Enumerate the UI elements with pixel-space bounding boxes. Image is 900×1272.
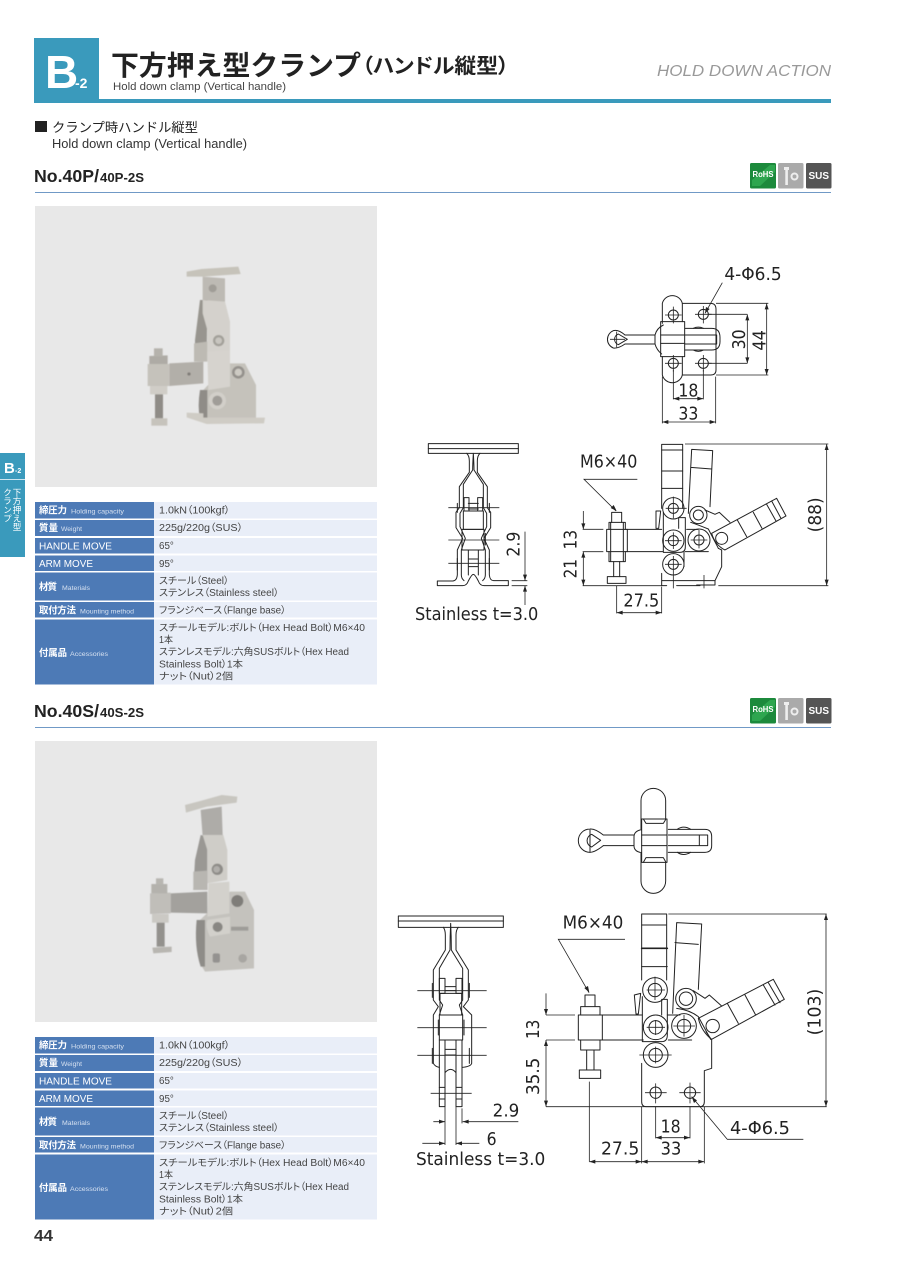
- row: weight: [35, 1055, 377, 1071]
- drawing: No.40P end view: [415, 444, 538, 625]
- row: weight: 225g/220g（SUS）: [159, 1057, 243, 1069]
- row: handle move: HANDLE MOVE: [39, 1076, 112, 1088]
- intro text: [35, 120, 247, 151]
- dimension labels: 21: [561, 559, 582, 578]
- row: accessories: 付属品: [39, 1182, 67, 1193]
- row: accessories: Stainless Bolt）1本: [159, 1192, 243, 1206]
- dimension labels: 18: [661, 1116, 681, 1137]
- product photo: No.40P: [35, 206, 377, 487]
- row: materials: ステンレス（Stainless steel）: [158, 1122, 279, 1134]
- row: mounting method: フランジベース（Flange base）: [159, 604, 286, 616]
- row: handle move: HANDLE MOVE: [39, 542, 112, 552]
- dimension labels: M6×40: [580, 451, 637, 472]
- row: handle move: 65°: [159, 541, 174, 552]
- row: accessories: ステンレスモデル:六角SUSボルト（Hex Head: [159, 1180, 349, 1193]
- side tab: -2: [15, 468, 21, 475]
- drawing: No.40S side view: [523, 912, 828, 1164]
- row: arm move: 95°: [159, 559, 174, 570]
- row: accessories: 付属品: [39, 647, 67, 658]
- intro text: クランプ時ハンドル縦型: [52, 120, 198, 135]
- row: holding capacity: [35, 1037, 377, 1054]
- dimension labels: 4-Φ6.5: [724, 264, 782, 285]
- row: arm move: 95°: [159, 1094, 174, 1105]
- row: mounting method: フランジベース（Flange base）: [159, 1140, 286, 1152]
- badges: No.40S: SUS: [808, 706, 829, 717]
- spec table: No.40P: [35, 502, 377, 684]
- section tab B-2: -2: [75, 75, 88, 91]
- row: accessories: ナット（Nut）2個: [159, 670, 233, 682]
- row: arm move: [35, 1090, 377, 1106]
- row: accessories: 1本: [159, 633, 173, 646]
- heading: No.40P: 40P-2S: [100, 170, 144, 185]
- row: arm move: [35, 556, 377, 571]
- row: materials: スチール（Steel）: [159, 1110, 229, 1122]
- category label: HOLD DOWN ACTION: [657, 63, 832, 80]
- side tab: 下方押え型: [12, 488, 22, 531]
- row: weight: 225g/220g（SUS）: [159, 522, 243, 534]
- badges: No.40P: [750, 163, 832, 188]
- row: weight: 質量: [39, 1057, 58, 1068]
- dimension labels: [415, 532, 538, 625]
- row: handle move: [35, 538, 377, 554]
- badges: No.40S: [750, 698, 832, 724]
- row: handle move: 65°: [159, 1076, 174, 1087]
- row: arm move: ARM MOVE: [39, 1094, 93, 1105]
- drawing: No.40S end view: [398, 916, 545, 1170]
- dimension labels: 2.9: [504, 532, 525, 557]
- dimension labels: Stainless t=3.0: [415, 604, 538, 625]
- row: accessories: 1本: [159, 1168, 173, 1181]
- row: accessories: Accessories: [70, 1186, 108, 1193]
- dimension labels: 30: [729, 329, 750, 349]
- heading: No.40P: [34, 166, 831, 193]
- row: holding capacity: 締圧力: [39, 1040, 67, 1050]
- dimension labels: 13: [523, 1020, 544, 1039]
- product photo: No.40S: [35, 741, 377, 1022]
- row: mounting method: Mounting method: [80, 1144, 135, 1150]
- row: holding capacity: 締圧力: [39, 504, 67, 516]
- row: accessories: [35, 620, 377, 684]
- dimension labels: 2.9: [493, 1101, 519, 1122]
- dimension labels: Stainless t=3.0: [416, 1149, 545, 1170]
- row: accessories: Accessories: [70, 651, 108, 658]
- drawing: No.40S top view: [578, 788, 712, 893]
- row: holding capacity: Holding capacity: [71, 1044, 125, 1050]
- dimension labels: (103): [804, 989, 825, 1035]
- row: weight: [35, 520, 377, 536]
- subtitle: Hold down clamp (Vertical handle): [113, 81, 286, 93]
- side tab: [0, 453, 25, 557]
- dimension labels: 13: [561, 530, 582, 549]
- dimension labels: 27.5: [601, 1138, 639, 1159]
- dimension labels: [678, 264, 782, 425]
- heading: No.40S: No.40S/: [34, 701, 99, 721]
- drawing: No.40P side view: [561, 444, 829, 615]
- page header: [34, 38, 832, 103]
- row: accessories: スチールモデル:ボルト（Hex Head Bolt）M6×40: [158, 621, 366, 634]
- row: holding capacity: [35, 502, 377, 518]
- section tab B-2: B: [45, 46, 78, 98]
- row: mounting method: [35, 602, 377, 618]
- row: holding capacity: 1.0kN（100kgf）: [159, 504, 230, 516]
- row: materials: 材質: [39, 1116, 57, 1127]
- row: materials: 材質: [39, 581, 57, 592]
- row: arm move: ARM MOVE: [39, 559, 93, 570]
- row: mounting method: 取付方法: [39, 1140, 77, 1150]
- heading: No.40S: [34, 701, 831, 728]
- dimension labels: 6: [487, 1129, 497, 1150]
- row: materials: ステンレス（Stainless steel）: [158, 587, 279, 599]
- row: handle move: [35, 1073, 377, 1088]
- row: accessories: ナット（Nut）2個: [159, 1204, 233, 1218]
- drawing: No.40P top view: [607, 264, 782, 425]
- dimension labels: 18: [678, 381, 698, 402]
- row: materials: [35, 1108, 377, 1136]
- dimension labels: [416, 1101, 545, 1170]
- dimension labels: 44: [749, 330, 770, 351]
- dimension labels: 33: [678, 404, 698, 425]
- row: materials: [35, 572, 377, 600]
- heading: No.40S: 40S-2S: [100, 705, 144, 720]
- dimension labels: 35.5: [523, 1058, 544, 1095]
- side tab: クランプ: [2, 488, 12, 522]
- section tab B-2: [34, 38, 99, 103]
- row: weight: 質量: [39, 522, 58, 533]
- row: weight: Weight: [61, 1061, 82, 1068]
- title suffix: （ハンドル縦型）: [362, 55, 509, 78]
- row: mounting method: 取付方法: [39, 604, 77, 616]
- row: holding capacity: Holding capacity: [71, 508, 125, 516]
- row: mounting method: Mounting method: [80, 608, 135, 616]
- row: materials: スチール（Steel）: [159, 575, 229, 587]
- badges: No.40P: RoHS: [752, 170, 774, 179]
- intro text: Hold down clamp (Vertical handle): [52, 137, 247, 151]
- dimension labels: 33: [661, 1138, 681, 1159]
- page number: 44: [34, 1228, 53, 1245]
- dimension labels: [523, 912, 825, 1159]
- dimension labels: M6×40: [563, 912, 623, 933]
- row: accessories: [35, 1154, 377, 1220]
- dimension labels: [561, 451, 826, 612]
- title: 下方押え型クランプ: [111, 50, 361, 81]
- row: materials: Materials: [62, 1120, 90, 1127]
- row: mounting method: [35, 1137, 377, 1152]
- row: materials: Materials: [62, 585, 90, 592]
- spec table: No.40S: [35, 1037, 377, 1220]
- dimension labels: (88): [805, 497, 826, 532]
- dimension labels: 27.5: [623, 591, 659, 612]
- heading: No.40P: No.40P/: [34, 166, 99, 186]
- dimension labels: 4-Φ6.5: [730, 1118, 790, 1139]
- badges: No.40S: RoHS: [752, 705, 774, 714]
- badges: No.40P: SUS: [808, 171, 829, 182]
- side tab: B: [4, 460, 15, 477]
- row: holding capacity: 1.0kN（100kgf）: [159, 1040, 230, 1052]
- row: accessories: Stainless Bolt）1本: [159, 658, 243, 670]
- row: accessories: スチールモデル:ボルト（Hex Head Bolt）M6×40: [158, 1156, 366, 1169]
- row: weight: Weight: [61, 526, 82, 533]
- row: accessories: ステンレスモデル:六角SUSボルト（Hex Head: [159, 645, 349, 658]
